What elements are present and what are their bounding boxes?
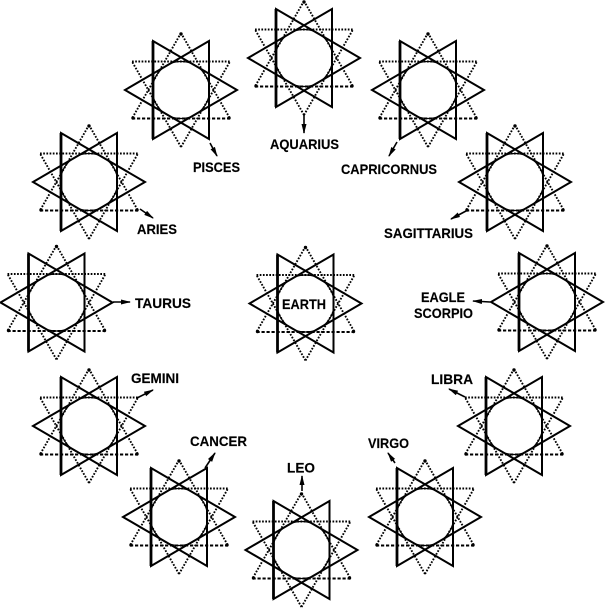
label: Pisces: PISCES: [193, 159, 240, 175]
label: Aquarius: AQUARIUS: [270, 136, 339, 152]
label: Taurus: TAURUS: [135, 295, 191, 311]
label: Capricornus: CAPRICORNUS: [341, 161, 437, 177]
label: Gemini: GEMINI: [131, 370, 179, 386]
star: Eagle Scorpio: [491, 244, 603, 359]
star: Gemini: [33, 368, 145, 483]
label: Libra: LIBRA: [431, 371, 473, 387]
star: Taurus: [0, 245, 112, 360]
label: Eagle: EAGLE: [421, 289, 465, 305]
arrow: Virgo: [388, 453, 395, 463]
arrow: Sagittarius: [451, 211, 466, 219]
star: Pisces: [125, 32, 237, 147]
arrow: Cancer: [205, 453, 215, 468]
star: Sagittarius: [459, 124, 571, 239]
star: Capricornus: [372, 32, 484, 147]
label: Virgo: VIRGO: [368, 435, 409, 451]
label: Scorpio: SCORPIO: [414, 305, 473, 321]
star: Cancer: [123, 459, 235, 574]
star: Aries: [33, 124, 145, 239]
star: Aquarius: [248, 0, 360, 115]
arrow: Gemini: [137, 390, 153, 398]
label: Leo: LEO: [287, 460, 315, 476]
label: Cancer: CANCER: [190, 433, 247, 449]
arrow: Leo: [301, 476, 303, 491]
label: Aries: ARIES: [137, 221, 177, 237]
arrow: Libra: [449, 389, 465, 397]
star: Libra: [458, 368, 570, 483]
star: Leo: [246, 492, 358, 607]
arrow: Aquarius: [303, 115, 305, 133]
arrow: Aries: [140, 209, 153, 218]
star: Virgo: [369, 459, 481, 574]
label: Earth: EARTH: [282, 296, 326, 312]
arrow: Eagle Scorpio: [473, 301, 490, 302]
arrow: Taurus: [113, 301, 130, 303]
star: Earth: [250, 246, 362, 360]
arrow: Capricornus: [389, 142, 397, 156]
arrow: Pisces: [210, 143, 217, 156]
label: Sagittarius: SAGITTARIUS: [384, 225, 473, 241]
